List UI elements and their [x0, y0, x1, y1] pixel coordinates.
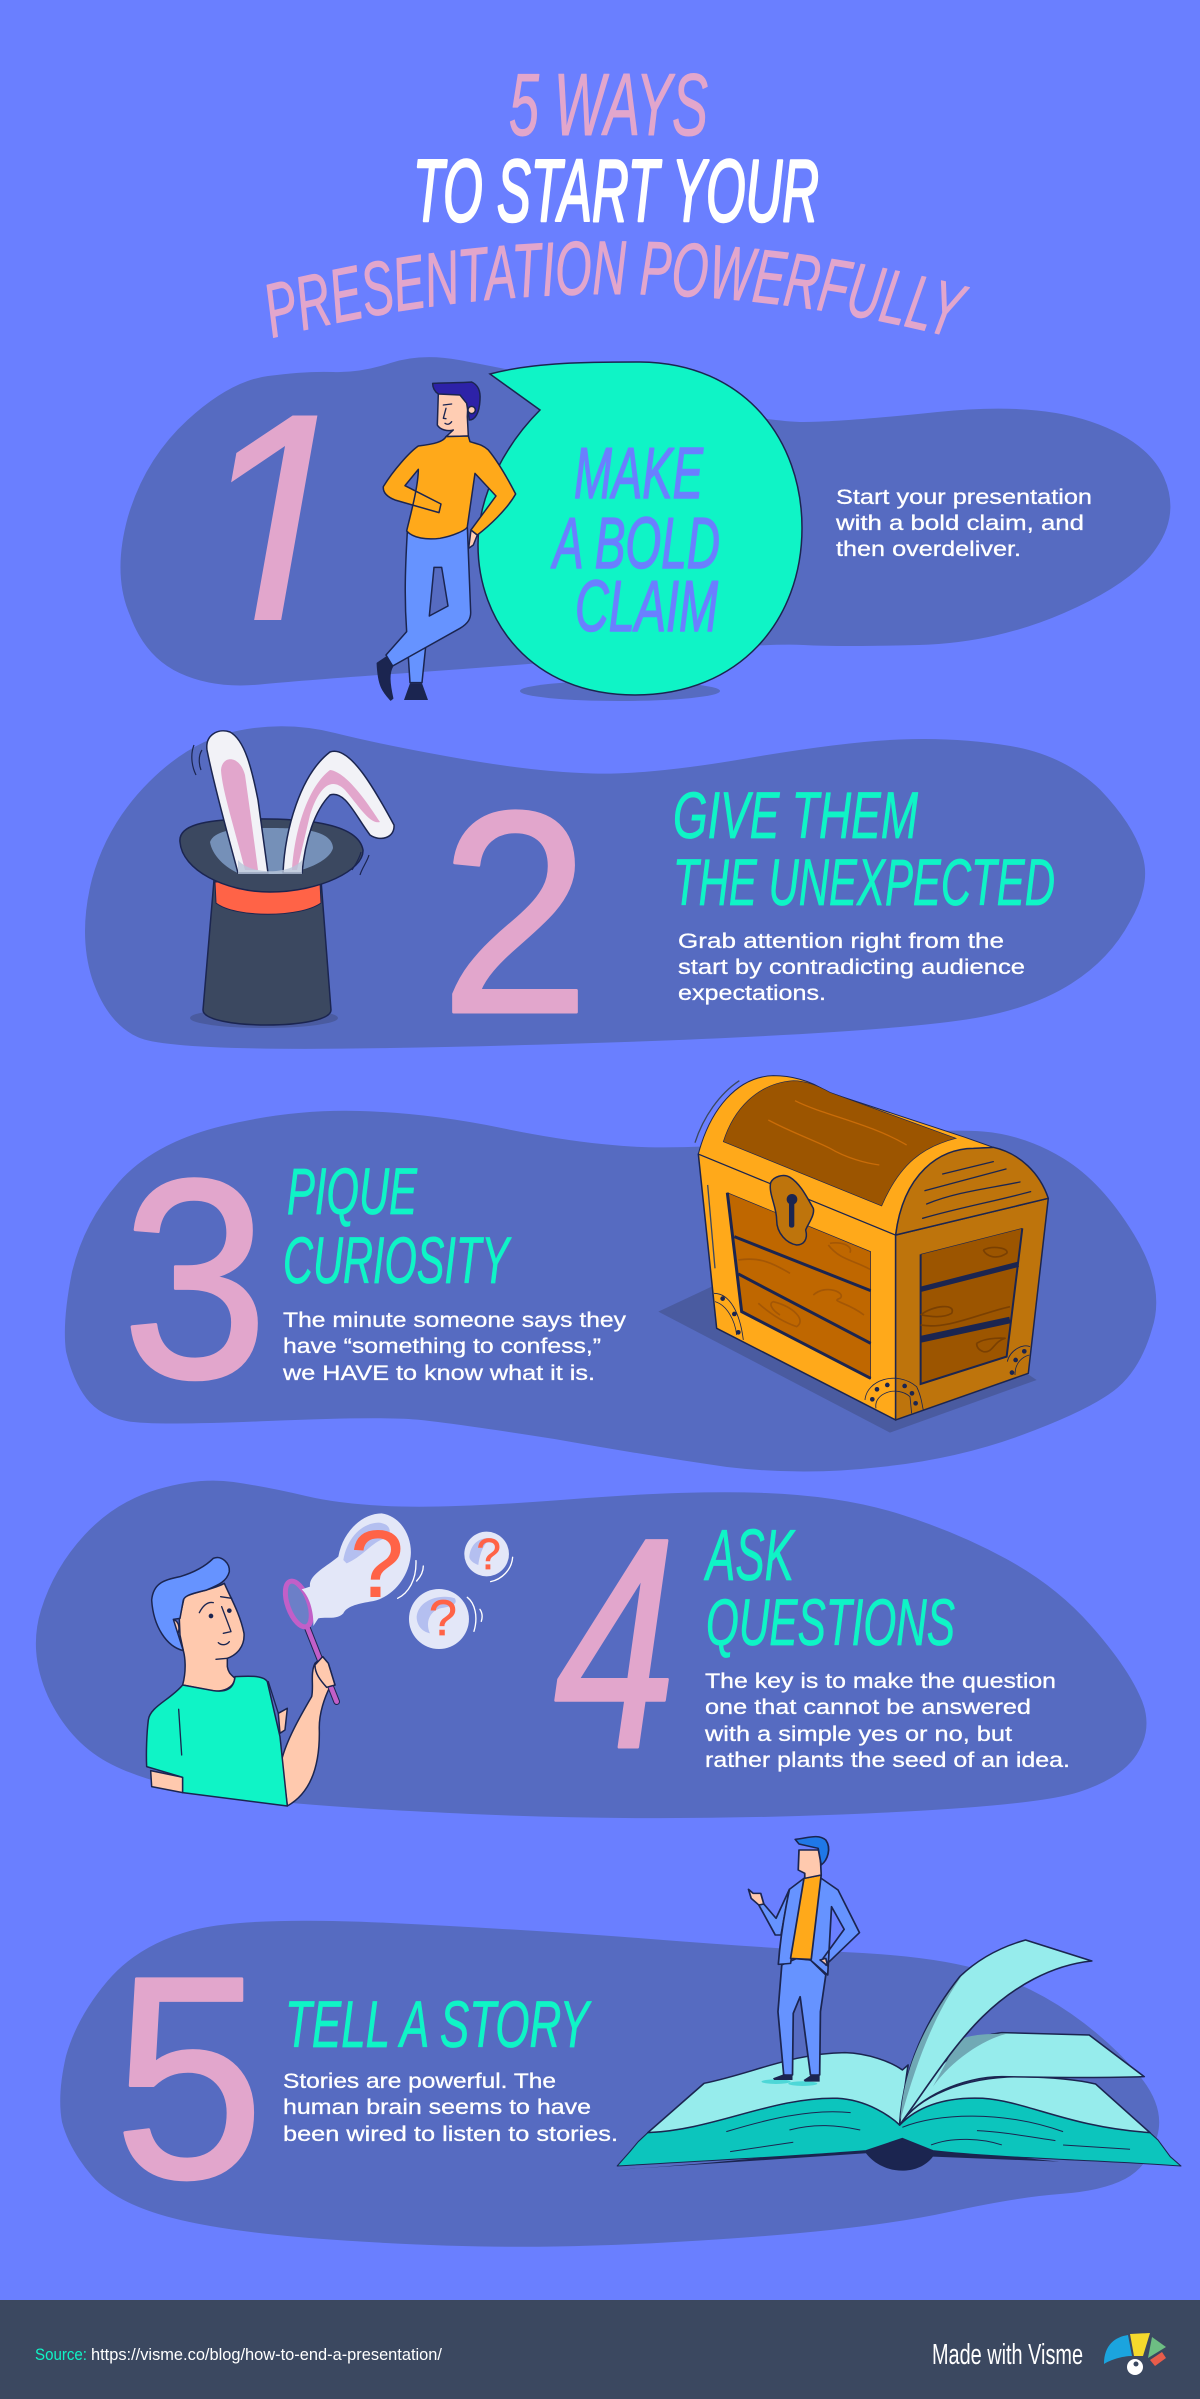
description: step 2: start by contradicting audience	[678, 956, 1025, 979]
heading: ask questions: QUESTIONS	[706, 1585, 955, 1659]
speech bubble	[478, 362, 802, 695]
panel: ask questions	[36, 1475, 1147, 1818]
heading: make a bold claim: CLAIM	[575, 567, 718, 647]
made with visme: Made with Visme	[932, 2339, 1083, 2371]
number 1: 1	[188, 343, 358, 717]
description: step 4: with a simple yes or no, but	[704, 1723, 1012, 1746]
description: step 3: The minute someone says they	[283, 1309, 627, 1332]
number 3: 3	[122, 1121, 268, 1438]
title: 5 WAYS	[509, 55, 708, 154]
description: step 2: expectations.	[678, 982, 826, 1005]
description: step 5	[283, 2070, 618, 2146]
description: step 4: The key is to make the question	[705, 1670, 1056, 1693]
icon: visme logo	[1104, 2333, 1166, 2375]
title	[266, 55, 970, 338]
question mark: ?	[477, 1531, 501, 1579]
icon: magic hat with rabbit ears	[180, 731, 394, 1028]
heading: give them the unexpected	[673, 778, 1055, 919]
description: step 1: with a bold claim, and	[835, 512, 1084, 535]
panel: make a bold claim	[120, 343, 1170, 717]
description: step 3	[282, 1309, 627, 1385]
icon: open book with man standing	[615, 1837, 1181, 2171]
description: step 4	[704, 1670, 1070, 1772]
person leaning on bubble	[377, 382, 516, 700]
heading: tell a story: TELL A STORY	[285, 1987, 592, 2061]
question mark: ?	[351, 1512, 403, 1618]
heading: make a bold claim	[550, 434, 720, 647]
heading: give them the unexpected: GIVE THEM	[673, 778, 918, 852]
description: step 2: Grab attention right from the	[678, 930, 1004, 953]
panel: give them the unexpected	[85, 726, 1145, 1074]
title: PRESENTATION POWERFULLY	[266, 240, 970, 338]
description: step 3: have “something to confess,”	[283, 1335, 601, 1358]
description: step 4: one that cannot be answered	[705, 1696, 1031, 1719]
description: step 5: been wired to listen to stories.	[283, 2123, 618, 2146]
number 4: 4	[554, 1475, 676, 1811]
description: step 5: human brain seems to have	[283, 2096, 591, 2119]
question mark: ?	[429, 1590, 457, 1646]
number 5: 5	[114, 1917, 264, 2239]
description: step 1: then overdeliver.	[836, 538, 1021, 561]
heading: ask questions: ASK	[704, 1516, 796, 1596]
heading: make a bold claim: A BOLD	[550, 504, 720, 584]
description: step 3: we HAVE to know what it is.	[282, 1362, 595, 1385]
icon: treasure chest	[658, 1076, 1048, 1433]
person blowing question bubbles	[146, 1512, 513, 1806]
footer	[0, 2300, 1200, 2399]
title: TO START YOUR	[413, 141, 819, 240]
panel: tell a story	[60, 1837, 1181, 2247]
heading: pique curiosity: PIQUE	[287, 1154, 418, 1228]
speech bubble shadow	[520, 681, 720, 701]
source: Source:	[35, 2345, 87, 2364]
heading: ask questions	[704, 1516, 955, 1659]
heading: pique curiosity	[283, 1154, 512, 1297]
description: step 1: Start your presentation	[836, 486, 1092, 509]
description: step 5: Stories are powerful. The	[283, 2070, 556, 2093]
panel: pique curiosity	[65, 1076, 1156, 1472]
description: step 1	[835, 486, 1092, 561]
source: https://visme.co/blog/how-to-end-a-presentation/	[91, 2345, 442, 2364]
description: step 2	[678, 930, 1025, 1005]
heading: make a bold claim: MAKE	[574, 434, 704, 514]
heading: pique curiosity: CURIOSITY	[283, 1223, 512, 1297]
description: step 4: rather plants the seed of an idea.	[705, 1749, 1070, 1772]
number 2: 2	[440, 752, 590, 1074]
